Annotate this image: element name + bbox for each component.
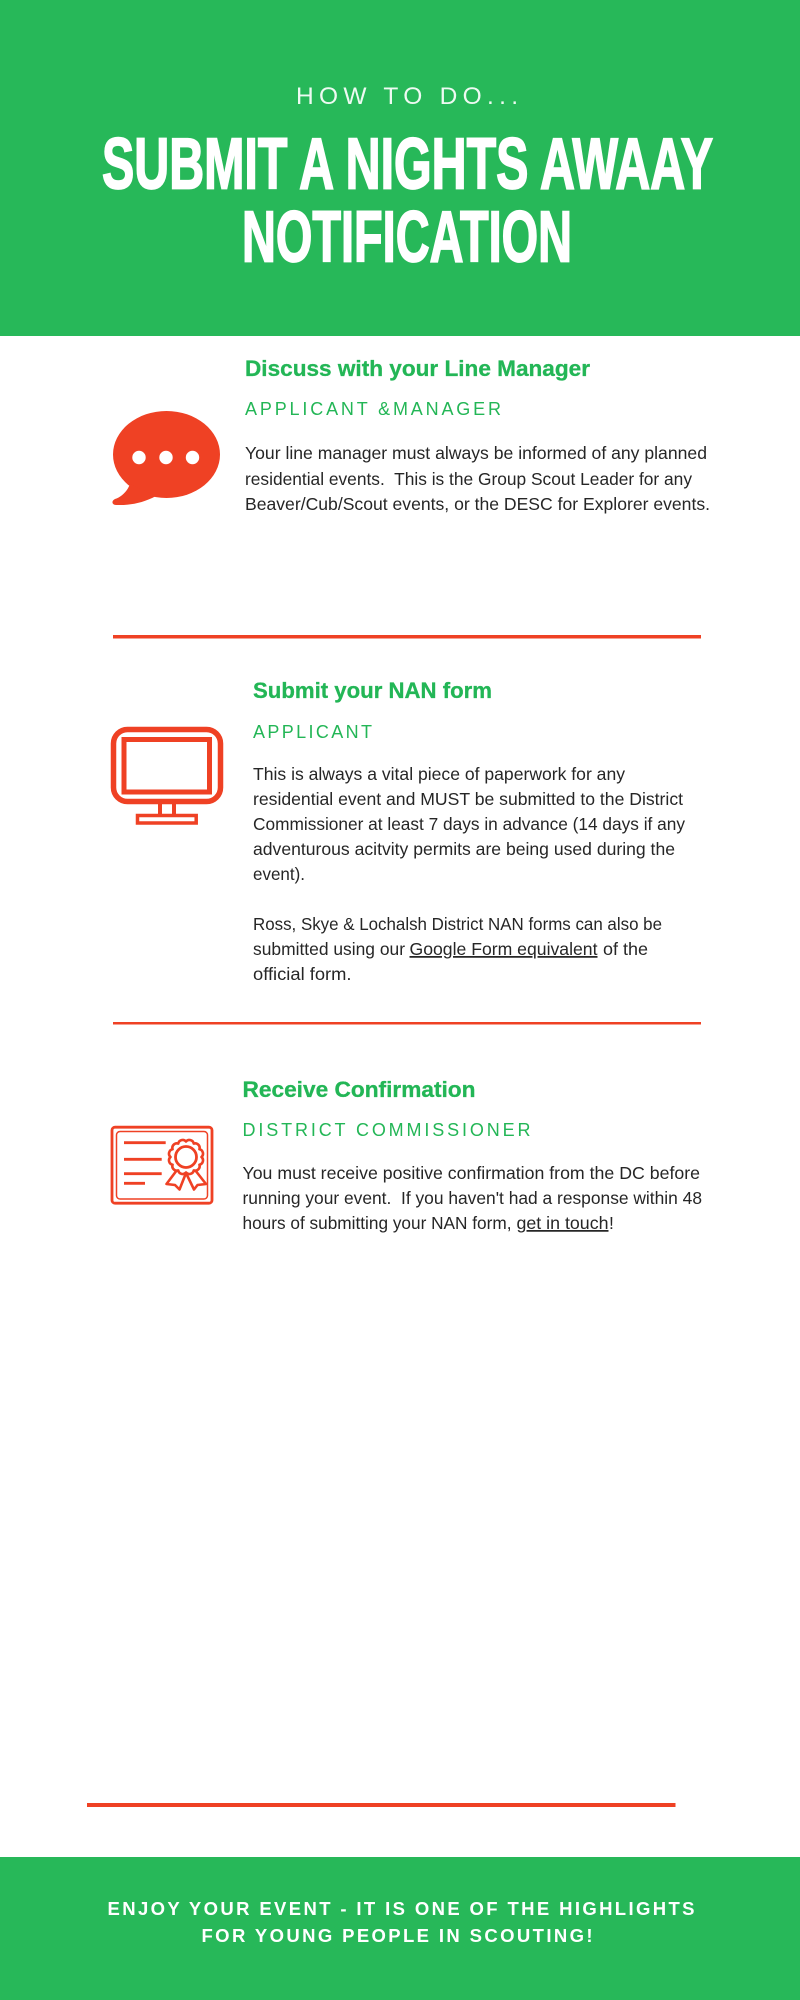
body text: !	[609, 1213, 614, 1233]
body text: Google Form equivalent	[410, 939, 598, 959]
role label: APPLICANT	[253, 722, 372, 742]
body text	[245, 443, 710, 514]
icon: certificate with rosette	[112, 1127, 212, 1203]
footer banner	[0, 1857, 800, 2000]
icon: speech bubble	[112, 411, 220, 505]
body text: This is always a vital piece of paperwork for any	[253, 764, 625, 784]
body text: get in touch	[516, 1213, 608, 1233]
body text: submitted using our	[253, 939, 405, 959]
panel: submit NAN form	[114, 678, 685, 984]
footer message: FOR YOUNG PEOPLE IN SCOUTING!	[202, 1925, 592, 1946]
title: NOTIFICATION	[242, 196, 572, 278]
body text: adventurous acitvity permits are being used during the	[253, 839, 675, 859]
title	[102, 124, 713, 278]
heading: Receive Confirmation	[242, 1077, 476, 1102]
body text	[253, 764, 685, 984]
role label: DISTRICT COMMISSIONER	[242, 1120, 530, 1140]
body text: You must receive positive confirmation from the DC before	[242, 1163, 700, 1183]
body text: Beaver/Cub/Scout events, or the DESC for Explorer events.	[245, 494, 710, 514]
eyebrow: how to do: HOW TO DO...	[296, 83, 518, 110]
header banner	[0, 0, 800, 336]
body text: event).	[253, 864, 305, 884]
panel: receive confirmation	[112, 1077, 702, 1233]
body text: residential event and MUST be submitted to the District	[253, 789, 683, 809]
body text: Your line manager must always be informed of any planned	[245, 443, 707, 463]
body text: of the	[603, 939, 648, 959]
body text: running your event. If you haven't had a response within 48	[242, 1188, 702, 1208]
body text: official form.	[253, 964, 352, 984]
heading: Discuss with your Line Manager	[245, 356, 590, 381]
body text: Ross, Skye & Lochalsh District NAN forms can also be	[253, 914, 662, 934]
panel: discuss with line manager	[112, 356, 710, 514]
footer message: ENJOY YOUR EVENT - IT IS ONE OF THE HIGHLIGHTS	[108, 1898, 694, 1919]
role label: APPLICANT &MANAGER	[245, 399, 501, 419]
footer message	[108, 1898, 694, 1946]
heading: Submit your NAN form	[253, 678, 492, 703]
body text: hours of submitting your NAN form,	[242, 1213, 512, 1233]
body text: residential events. This is the Group Scout Leader for any	[245, 469, 692, 489]
icon: computer monitor	[114, 730, 220, 823]
body text	[242, 1163, 702, 1233]
body text: Commissioner at least 7 days in advance (14 days if any	[253, 814, 685, 834]
